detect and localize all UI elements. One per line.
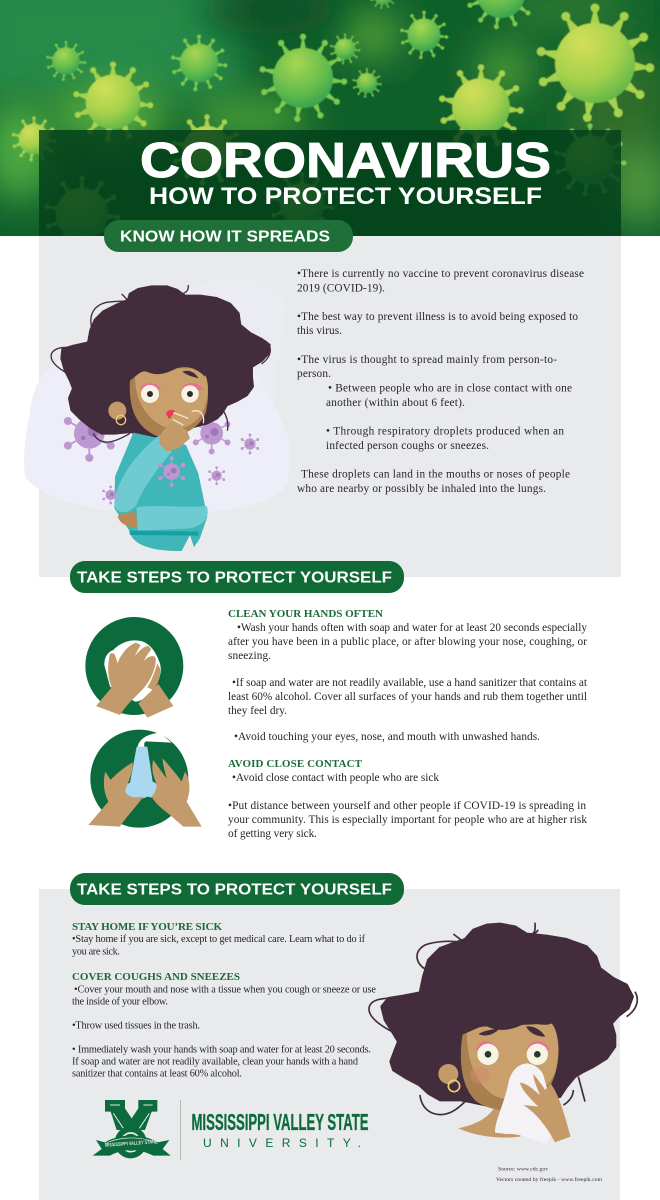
- hair strands: [51, 285, 270, 442]
- icon: tiny virus two: [352, 68, 382, 98]
- icon: virus left: [73, 62, 154, 142]
- heading: clean your hands often: CLEAN YOUR HANDS OFTEN: [228, 608, 383, 620]
- ear and earring: [108, 402, 126, 420]
- text block: how it spreads: infected person coughs or sneezes.: [326, 440, 489, 452]
- belt: [129, 531, 198, 536]
- text block: stay home and cover coughs: you are sick.: [72, 946, 120, 958]
- text block: clean hands and avoid contact: of getting very sick.: [228, 828, 317, 840]
- panel: stay home background: [39, 889, 620, 1200]
- text block: how it spreads: 2019 (COVID-19).: [297, 282, 385, 294]
- faint upper cloud: [63, 278, 290, 470]
- text block: how it spreads: •There is currently no vaccine to prevent coronavirus disease: [297, 268, 584, 280]
- panel: know how it spreads background: [39, 236, 621, 577]
- crest ribbon: [93, 1136, 171, 1156]
- virus right: [209, 467, 225, 485]
- text block: clean hands and avoid contact: [228, 608, 588, 840]
- text block: how it spreads: •The best way to prevent illness is to avoid being exposed to: [297, 311, 578, 323]
- text block: how it spreads: this virus.: [297, 325, 342, 337]
- icon: virus lower right: [438, 64, 524, 150]
- icon: virus centre: [259, 34, 347, 122]
- text block: clean hands and avoid contact: they feel dry.: [228, 705, 287, 717]
- text block: how it spreads: another (within about 6 feet).: [326, 397, 465, 409]
- text block: stay home and cover coughs: sanitizer that contains at least 60% alcohol.: [72, 1068, 242, 1080]
- hair strands: [369, 923, 637, 1115]
- source credits: [496, 1166, 603, 1183]
- heading pill: take steps to protect yourself second: TAKE STEPS TO PROTECT YOURSELF: [77, 882, 392, 898]
- heading pill: know how it spreads: KNOW HOW IT SPREADS: [120, 228, 330, 246]
- illustration: woman blowing nose with tissue: [369, 923, 637, 1144]
- icon: virus lower left: [44, 176, 120, 252]
- text block: how it spreads: These droplets can land in the mouths or noses of people: [301, 468, 570, 480]
- lower hand: [118, 512, 137, 528]
- text block: how it spreads: • Between people who are in close contact with one: [328, 382, 572, 394]
- text block: how it spreads: person.: [297, 368, 331, 380]
- logo divider: [180, 1100, 181, 1160]
- logo wordmark: [192, 1109, 368, 1150]
- icon: large virus right: [536, 4, 655, 123]
- text block: stay home and cover coughs: the inside of your elbow.: [72, 996, 168, 1008]
- source credits: Source: www.cdc.gov: [498, 1166, 548, 1172]
- text block: clean hands and avoid contact: after you have been in a public place, or after blowing your nose, coughing, or: [228, 636, 587, 648]
- text block: how it spreads: •The virus is thought to spread mainly from person-to-: [297, 354, 557, 366]
- icon: small virus upper left: [171, 35, 227, 91]
- text block: clean hands and avoid contact: •Put distance between yourself and other people if COVID-19 is spreading in: [228, 800, 586, 812]
- illustration: coughing woman with purple viruses: [24, 278, 290, 551]
- title band: [39, 130, 621, 236]
- text block: how it spreads: who are nearby or possibly be inhaled into the lungs.: [297, 483, 546, 495]
- logo wordmark: MISSISSIPPI VALLEY STATE: [192, 1109, 368, 1135]
- text block: clean hands and avoid contact: •Wash your hands often with soap and water for at least 20 seconds especially: [237, 622, 587, 634]
- heading pill: know how it spreads: [104, 220, 353, 252]
- heading pill: take steps to protect yourself: TAKE STEPS TO PROTECT YOURSELF: [77, 570, 392, 586]
- tissue: [495, 1063, 557, 1144]
- text block: clean hands and avoid contact: least 60% alcohol. Cover all surfaces of your hands and rub them together until: [228, 691, 587, 703]
- text block: stay home and cover coughs: • Immediately wash your hands with soap and water for at least 20 seconds.: [72, 1044, 371, 1056]
- arm across: [137, 506, 208, 531]
- text block: stay home and cover coughs: •Stay home if you are sick, except to get medical care. Learn what to do if: [72, 934, 366, 945]
- virus on chest: [158, 457, 185, 487]
- icon: virus lower centre: [270, 173, 335, 237]
- sweater: [114, 433, 207, 551]
- text block: clean hands and avoid contact: •Avoid close contact with people who are sick: [232, 772, 439, 784]
- icon: virus under band right: [554, 123, 627, 197]
- neck and chest: [458, 1107, 533, 1138]
- university line: UNIVERSITY.: [203, 1136, 361, 1150]
- virus back right: [194, 413, 230, 454]
- title: CORONAVIRUS: [140, 134, 551, 188]
- virus far right: [241, 434, 259, 454]
- heading pill: take steps to protect yourself second: [70, 873, 404, 905]
- heading: avoid close contact: AVOID CLOSE CONTACT: [228, 758, 363, 770]
- text block: how it spreads: • Through respiratory droplets produced when an: [326, 426, 564, 438]
- hair: [382, 924, 633, 1107]
- text block: stay home and cover coughs: •Cover your mouth and nose with a tissue when you cough or sneeze or use: [74, 984, 376, 996]
- text block: stay home and cover coughs: [72, 921, 376, 1080]
- heading pill: take steps to protect yourself: [70, 561, 404, 593]
- mouth and cough lines: [166, 410, 175, 419]
- icon: small virus far left: [46, 41, 86, 81]
- virus on arm: [103, 486, 119, 504]
- heading: cover coughs: COVER COUGHS AND SNEEZES: [72, 971, 240, 983]
- title: [140, 134, 551, 210]
- icon: tiny virus one: [330, 34, 360, 64]
- crest wordmark: MISSISSIPPI VALLEY STATE: [105, 1139, 157, 1149]
- text block: clean hands and avoid contact: •Avoid touching your eyes, nose, and mouth with unwashed hands.: [234, 731, 540, 743]
- text block: clean hands and avoid contact: •If soap and water are not readily available, use a hand sanitizer that contains at: [232, 677, 588, 689]
- text block: how it spreads: [297, 268, 584, 495]
- text block: stay home and cover coughs: •Throw used tissues in the trash.: [72, 1020, 200, 1032]
- hand at mouth: [159, 423, 190, 452]
- text block: stay home and cover coughs: If soap and water are not readily available, clean your hands with a hand: [72, 1056, 359, 1068]
- arm raised: [114, 435, 172, 512]
- logo: MVSU crest: [93, 1100, 171, 1158]
- neck and face: [130, 367, 208, 437]
- icon: virus left edge: [12, 116, 57, 162]
- eyes: [140, 383, 203, 390]
- face: [461, 1023, 559, 1110]
- text block: clean hands and avoid contact: sneezing.: [228, 650, 271, 662]
- icon: washing hands: [85, 617, 183, 718]
- icon: washing face: [88, 730, 202, 828]
- heading: stay home: STAY HOME IF YOU’RE SICK: [72, 921, 222, 933]
- eyes: [476, 1041, 550, 1050]
- icon: virus top edge: [466, 0, 536, 29]
- vector credit: Vectors created by freepik - www.freepik.com: [496, 1176, 603, 1183]
- virus back left: [65, 406, 114, 461]
- text block: clean hands and avoid contact: your community. This is especially important for people who are at higher risk: [228, 814, 587, 826]
- cheek blush: [470, 1067, 490, 1083]
- icon: virus top tiny: [370, 0, 396, 9]
- hair fringe: [128, 353, 217, 382]
- banner: green virus background: [0, 0, 660, 252]
- hand holding tissue: [520, 1074, 571, 1142]
- hair: [62, 287, 269, 437]
- ear and earring: [438, 1064, 458, 1084]
- hair fringe: [462, 1003, 557, 1035]
- lavender cloud: [24, 358, 290, 512]
- icon: virus upper middle: [400, 11, 448, 59]
- icon: virus behind title: [172, 114, 243, 186]
- subtitle: HOW TO PROTECT YOURSELF: [149, 183, 542, 210]
